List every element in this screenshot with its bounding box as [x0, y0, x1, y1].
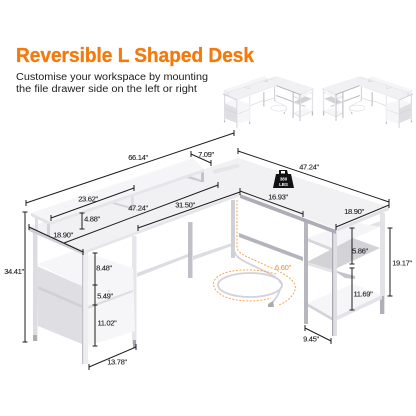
title: Reversible L Shaped Desk: [16, 44, 255, 67]
dimension: total height 34.41: 34.41": [4, 267, 24, 276]
dimension: left depth 18.90: 18.90": [53, 230, 73, 240]
thumbnail: drawers on left: [223, 76, 314, 128]
weight capacity icon: LBS: [279, 182, 288, 187]
dimension: riser height 4.88: 4.88": [84, 214, 101, 224]
file cabinet with drawers: [37, 250, 135, 364]
dimension: shelf gap 5.86: 5.86": [352, 246, 369, 256]
dimension: shelf gap 11.69: [350, 268, 373, 310]
dimension: shelf depth 9.45: 9.45": [303, 334, 320, 344]
dimension: overall width 66.14: 66.14": [128, 153, 148, 162]
dimension: left length 47.24: 47.24": [128, 204, 148, 212]
dimension: left depth 18.90: [29, 224, 83, 255]
subtitle text: Customise your workspace by mounting: [16, 72, 208, 83]
dimension: lower drawer height 11.02: [92, 305, 117, 346]
weight capacity icon: [273, 170, 294, 188]
dimension: total height 34.41: [4, 212, 28, 342]
dimension: right depth 18.90: 18.90": [344, 207, 364, 216]
dimension: shelf unit height 19.17: 19.17": [392, 258, 412, 268]
dimension: shelf depth 9.45: [303, 325, 331, 344]
left section legs and cross bars: [33, 200, 235, 348]
dimension: shelf gap 11.69: 11.69": [353, 290, 373, 298]
dimension: cabinet width 13.78: 13.78": [107, 358, 127, 366]
power cord: [218, 247, 282, 307]
weight capacity icon: 380: [280, 176, 288, 182]
dimension: riser width 23.62: 23.62": [78, 194, 98, 204]
dimension: drawer height 5.49: [92, 285, 114, 305]
orange dashed cord highlight: [213, 200, 295, 305]
dimension: right length 47.24: 47.24": [299, 162, 319, 172]
monitor riser: [31, 158, 204, 237]
dimension: riser depth 7.09: [191, 150, 215, 166]
dimension: inner right 16.93: [240, 188, 303, 217]
dimension: shelf height 8.48: [92, 253, 113, 285]
cord length label: 6.60": [275, 263, 292, 272]
dimension: riser height 4.88: [80, 213, 101, 229]
dimension: cabinet width 13.78: [89, 344, 136, 370]
dimension: drawer height 5.49: 5.49": [97, 292, 114, 300]
dimension: overall width 66.14: [26, 130, 234, 206]
dimension: inner left 31.50: [138, 189, 240, 231]
thumbnail: drawers on right: [322, 76, 413, 128]
dimension: shelf height 8.48: 8.48": [96, 264, 113, 272]
shelf 3: [307, 284, 382, 318]
dimension: inner left 31.50: 31.50": [175, 200, 195, 210]
shelf 2: [307, 238, 380, 270]
dimension: shelf gap 5.86: [350, 228, 369, 264]
desktop surface: [29, 158, 389, 255]
dimension: left length 47.24: [64, 182, 218, 243]
dimension: riser width 23.62: [51, 185, 134, 221]
power strip: [212, 164, 240, 174]
dimension: riser depth 7.09: 7.09": [198, 150, 215, 159]
dimension: right length 47.24: [238, 148, 389, 205]
main L shaped desk illustration: [29, 158, 389, 364]
right wing frame, legs and shelves: [239, 194, 385, 336]
shelf 1: [307, 222, 380, 248]
subtitle text: [16, 72, 208, 95]
subtitle text: the file drawer side on the left or right: [16, 84, 197, 95]
dimension: inner right 16.93: 16.93": [268, 192, 288, 202]
dimension: shelf unit height 19.17: [388, 228, 412, 296]
dimension: lower drawer height 11.02: 11.02": [97, 318, 117, 328]
dimension: right depth 18.90: [336, 202, 389, 230]
